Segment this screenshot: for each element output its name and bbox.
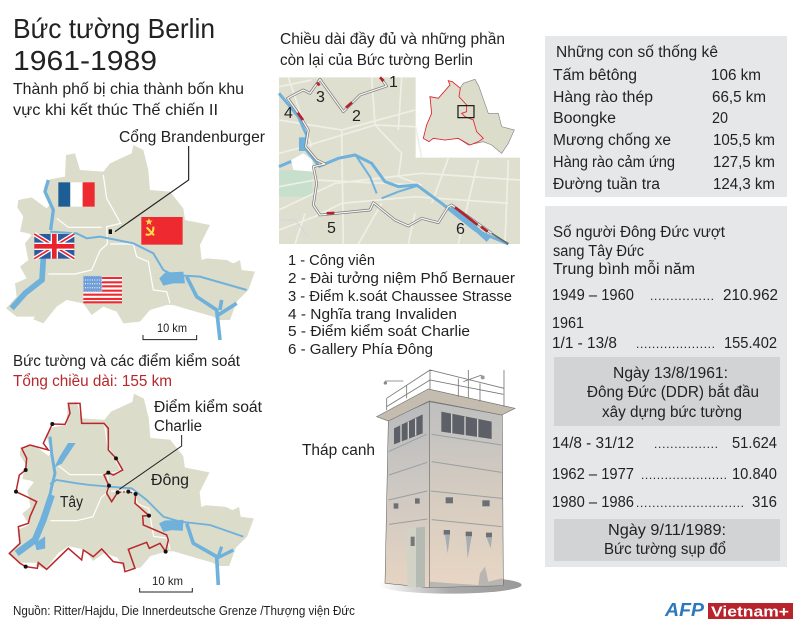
rows after the wall: ...........................: [636, 496, 744, 510]
title: [13, 13, 215, 76]
statistics rows: Tấm bêtông: [553, 67, 637, 84]
door: [407, 527, 425, 588]
map: central Berlin with remaining wall sections: 4: [284, 105, 293, 122]
map: central Berlin with remaining wall sections: 6: [456, 221, 465, 238]
statistics rows: Boongke: [553, 110, 616, 127]
railing: [385, 370, 504, 410]
flag: USSR: [141, 217, 183, 245]
heading: wall remains map: [280, 31, 505, 69]
rows after the wall: ................: [654, 437, 718, 451]
wall line: [9, 403, 168, 572]
map legend: 4 - Nghĩa trang Invaliden: [288, 306, 457, 323]
illustration: watchtower: [377, 370, 522, 594]
rivers: [279, 93, 508, 244]
heading: wall and checkpoints: Bức tường và các điểm kiểm soát: [13, 353, 241, 370]
source: Nguồn: Ritter/Hajdu, Die Innerdeutsche Grenze /Thượng viện Đức: [13, 604, 355, 618]
statistics rows: Mương chống xe: [553, 132, 671, 149]
rows after the wall: 1962 – 1977: [552, 466, 634, 483]
callout: wall construction: xây dựng bức tường: [602, 404, 742, 421]
callout: wall construction: Đông Đức (DDR) bắt đầu: [587, 384, 759, 401]
bands: [388, 434, 502, 527]
map legend: 1 - Công viên: [288, 252, 375, 269]
title: 1961-1989: [13, 45, 157, 76]
logo: AFP Vietnam+: AFP: [664, 600, 705, 620]
rows before the wall: ....................: [636, 337, 715, 351]
rows before the wall: 210.962: [723, 287, 778, 304]
statistics rows: 105,5 km: [713, 132, 775, 149]
rows after the wall: 14/8 - 31/12: [552, 435, 634, 452]
heading: wall remains map: Chiều dài đầy đủ và những phần: [280, 31, 505, 48]
rows after the wall: 316: [752, 494, 777, 511]
statistics rows: 66,5 km: [712, 89, 766, 106]
logo: AFP Vietnam+: [664, 600, 793, 620]
statistics rows: 106 km: [711, 67, 761, 84]
statistics rows: [553, 67, 775, 193]
panel: East Germans crossing: [545, 206, 787, 567]
rows after the wall: 51.624: [732, 435, 777, 452]
map: four occupation sectors: [6, 128, 266, 340]
wall route: [288, 79, 492, 233]
statistics rows: 127,5 km: [713, 154, 775, 171]
label: watchtower: Tháp canh: [302, 442, 375, 459]
rows before the wall: 1961: [552, 315, 584, 332]
rows after the wall: ......................: [641, 468, 727, 482]
windows: [394, 412, 492, 444]
logo: AFP Vietnam+: Vietnam+: [711, 604, 789, 620]
checkpoints: [14, 422, 168, 569]
slits: [394, 497, 492, 537]
title: Bức tường Berlin: [13, 13, 215, 44]
rows after the wall: [552, 435, 777, 511]
callout: wall falls: [554, 519, 780, 561]
heading: wall and checkpoints: [13, 353, 241, 390]
rows before the wall: 1/1 - 13/8: [552, 335, 617, 352]
map legend: 6 - Gallery Phía Đông: [288, 341, 433, 358]
map legend: [288, 252, 515, 358]
callout: wall falls: Ngày 9/11/1989:: [608, 522, 726, 539]
statistics rows: 124,3 km: [713, 176, 775, 193]
flag: UK: [34, 234, 74, 259]
flag: France: [58, 182, 95, 207]
crossing heading: Số người Đông Đức vượt: [553, 224, 726, 241]
map: wall and checkpoints: Điểm kiểm soát: [154, 399, 263, 416]
map: wall and checkpoints: Tây: [60, 494, 83, 511]
subtitle: four sectors: [13, 81, 244, 119]
callout: wall construction: [554, 357, 780, 426]
map: central Berlin with remaining wall sections: 2: [352, 108, 361, 125]
rows after the wall: 10.840: [732, 466, 777, 483]
remaining sections: [298, 77, 488, 232]
map: wall and checkpoints: Charlie: [154, 418, 202, 435]
statistics rows: Hàng rào thép: [553, 89, 653, 106]
map: four occupation sectors: Cổng Brandenburger: [119, 128, 266, 146]
statistics rows: 20: [712, 110, 728, 127]
map legend: 3 - Điểm k.soát Chaussee Strasse: [288, 288, 512, 305]
rivers and lakes: [17, 437, 243, 585]
rows before the wall: [552, 287, 778, 352]
map: four occupation sectors: 10 km: [157, 321, 187, 335]
rows before the wall: 1949 – 1960: [552, 287, 634, 304]
crossing heading: sang Tây Đức: [553, 243, 644, 260]
callout: wall falls: Bức tường sụp đổ: [604, 541, 726, 558]
map: wall and checkpoints: Đông: [151, 472, 189, 489]
heading: wall and checkpoints: Tổng chiều dài: 155 km: [13, 373, 172, 390]
statistics rows: Hàng rào cảm ứng: [553, 154, 675, 171]
map: central Berlin with remaining wall sections: 1: [389, 74, 398, 91]
panel: statistics: [545, 36, 787, 197]
inset: Berlin locator: [423, 79, 514, 153]
heading: wall remains map: còn lại của Bức tường Berlin: [280, 52, 473, 69]
flag: USA: [83, 276, 122, 303]
map: central Berlin with remaining wall sections: 5: [327, 220, 336, 237]
crossing heading: Trung bình mỗi năm: [553, 261, 695, 278]
map: wall and checkpoints: [9, 394, 263, 592]
map legend: 5 - Điểm kiểm soát Charlie: [288, 323, 470, 340]
rows before the wall: ................: [650, 289, 714, 303]
rows after the wall: 1980 – 1986: [552, 494, 634, 511]
map: central Berlin with remaining wall sections: [279, 74, 520, 244]
subtitle: four sectors: vực khi kết thúc Thế chiến II: [13, 102, 218, 119]
map legend: 2 - Đài tưởng niệm Phố Bernauer: [288, 270, 515, 287]
map: wall and checkpoints: 10 km: [152, 574, 183, 588]
crossing heading: [553, 224, 726, 278]
statistics heading: Những con số thống kê: [556, 44, 718, 61]
statistics rows: Đường tuần tra: [553, 176, 660, 193]
rows before the wall: 155.402: [724, 335, 777, 352]
subtitle: four sectors: Thành phố bị chia thành bốn khu: [13, 81, 244, 98]
callout: wall construction: Ngày 13/8/1961:: [613, 365, 728, 382]
map: central Berlin with remaining wall sections: 3: [316, 89, 325, 106]
